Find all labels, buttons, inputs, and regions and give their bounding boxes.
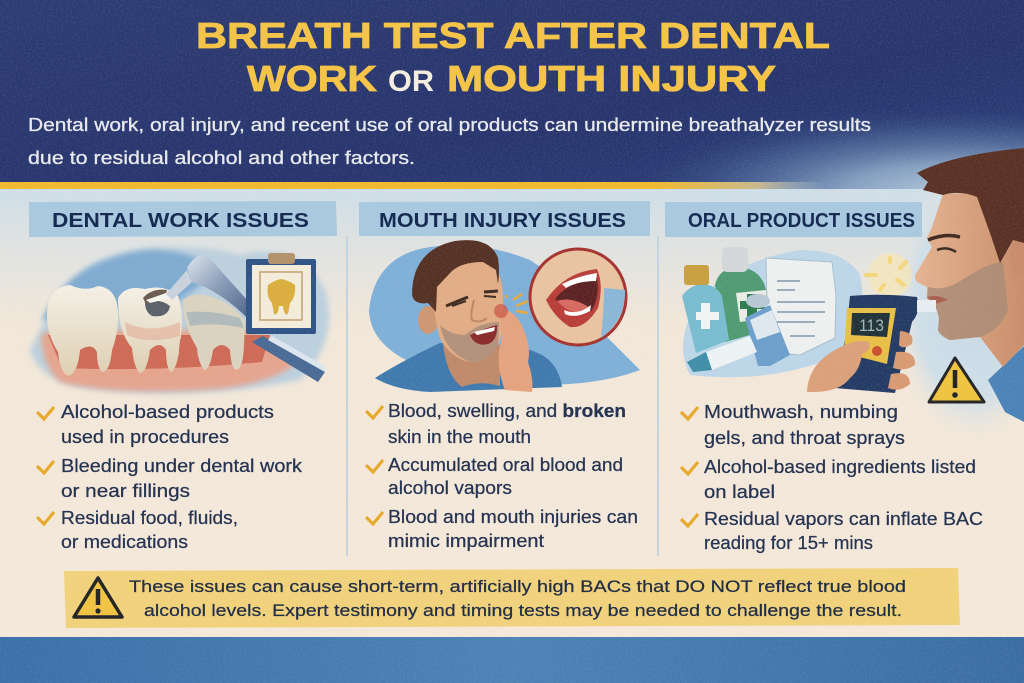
tooth middle (118, 288, 182, 373)
icon: warning triangle (929, 358, 984, 402)
bullet list: dental: Bleeding under dental work (61, 456, 303, 476)
breathalyzer screen: 113 (859, 316, 884, 335)
neck (442, 335, 500, 387)
icon: callout warning triangle (74, 578, 122, 617)
ear (418, 306, 438, 334)
bullet list: oral products: Mouthwash, numbing (704, 402, 898, 422)
hair (412, 240, 499, 312)
title: MOUTH INJURY (447, 58, 776, 99)
mouth close-up circle (530, 249, 626, 345)
header background (0, 0, 1024, 190)
heading ribbon: mouth injury (359, 201, 650, 236)
title (196, 15, 830, 99)
bullet list: oral products: on label (704, 482, 775, 502)
ear (1010, 238, 1024, 276)
illustration: oral products (682, 247, 862, 377)
clipboard (246, 253, 316, 334)
check marks (366, 406, 383, 524)
stubble (927, 262, 1008, 340)
breathalyzer in hand (807, 295, 936, 393)
bullet list: oral products: reading for 15+ mins (704, 533, 873, 553)
heading ribbon: dental work (29, 201, 337, 237)
tube (687, 336, 757, 372)
lips (927, 296, 948, 304)
bullet list: mouth injury: skin in the mouth (388, 427, 531, 447)
heading ribbon: oral product (665, 202, 922, 237)
intro text (28, 115, 871, 168)
tooth right (183, 294, 245, 370)
bullet list: dental: or medications (61, 532, 188, 552)
bullet list: mouth injury: Blood, swelling, and broken (388, 401, 626, 421)
title: OR (388, 65, 434, 98)
bullet list: oral products: Alcohol-based ingredients listed (704, 457, 976, 477)
small bottle (745, 294, 790, 366)
check marks (37, 407, 54, 524)
bullet list: mouth injury: Blood and mouth injuries can (388, 507, 638, 527)
bullet list: mouth injury: mimic impairment (388, 531, 544, 551)
panel: dental work issues (29, 201, 337, 552)
bullet list: dental (37, 402, 303, 552)
gold accent stripe (0, 182, 860, 189)
panel background (0, 189, 1024, 638)
callout: warning note: alcohol levels. Expert testimony and timing tests may be needed to challenge the result. (144, 601, 902, 620)
panel: mouth injury issues (359, 201, 650, 551)
document (766, 258, 836, 355)
green bottle (715, 247, 768, 342)
callout: warning note (64, 568, 960, 628)
man in profile (915, 148, 1024, 422)
shirt (375, 343, 562, 392)
face and neck (915, 190, 1024, 367)
bullet list: mouth injury: Accumulated oral blood and (388, 455, 623, 475)
shirt (988, 346, 1024, 422)
title: BREATH TEST AFTER DENTAL (196, 15, 830, 56)
tooth left (47, 285, 118, 376)
hair (917, 148, 1024, 263)
hand (498, 310, 532, 392)
decay (145, 301, 170, 316)
hand (807, 341, 870, 392)
bullet list: oral products: gels, and throat sprays (704, 428, 905, 448)
eyes and brows (446, 291, 498, 306)
blue bottle (682, 265, 729, 353)
bullet list: mouth injury: alcohol vapors (388, 478, 512, 498)
intro text: due to residual alcohol and other factors. (28, 148, 415, 168)
bullet list: dental: Alcohol-based products (61, 402, 274, 422)
heading ribbon: mouth injury: MOUTH INJURY ISSUES (379, 210, 626, 232)
bottom band (0, 637, 1024, 683)
heading ribbon: dental work: DENTAL WORK ISSUES (52, 210, 309, 232)
title: WORK (247, 58, 377, 99)
eye and brow (928, 236, 960, 240)
bullet list: dental: Residual food, fluids, (61, 508, 238, 528)
nose (471, 300, 487, 322)
panel: oral product issues (665, 148, 1024, 553)
bullet list: dental: used in procedures (61, 427, 229, 447)
check marks (681, 407, 698, 526)
dental drill (146, 255, 325, 382)
bullet list: dental: or near fillings (61, 481, 190, 501)
column dividers (347, 236, 658, 556)
gums (41, 328, 295, 391)
face (434, 260, 503, 362)
sparkle (866, 253, 912, 297)
callout: warning note: These issues can cause short-term, artificially high BACs that DO NOT reflect true blood (129, 577, 906, 596)
illustration: teeth and drill (30, 247, 329, 393)
pain marks (506, 294, 528, 313)
bullet list: mouth injury (366, 401, 638, 551)
intro text: Dental work, oral injury, and recent use of oral products can undermine breathalyzer results (28, 115, 871, 135)
heading ribbon: oral product: ORAL PRODUCT ISSUES (688, 210, 915, 232)
bullet list: oral products (681, 402, 983, 553)
bullet list: oral products: Residual vapors can inflate BAC (704, 509, 983, 529)
illustration: man holding jaw (369, 240, 640, 392)
mouth (470, 325, 497, 345)
